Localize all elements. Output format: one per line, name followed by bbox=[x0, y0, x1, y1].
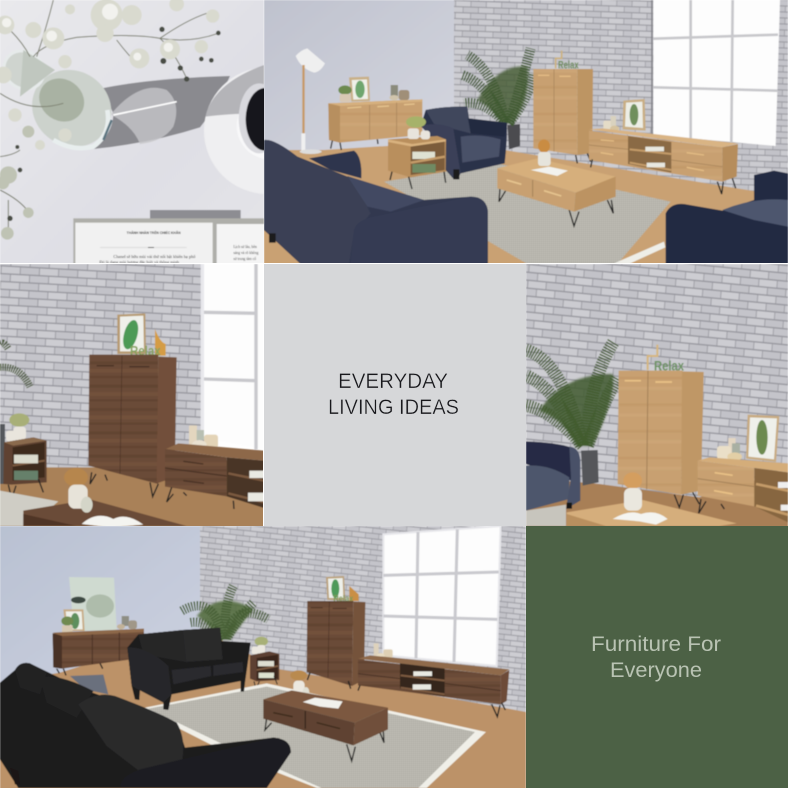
black leather sofa, foreground bbox=[0, 663, 291, 788]
navy armchair bbox=[526, 441, 580, 511]
potted palm behind loveseat bbox=[182, 586, 268, 639]
navy sofa, foreground right bbox=[666, 171, 788, 264]
tall oak cabinet with Relax sign bbox=[533, 51, 593, 163]
patterned rug bbox=[140, 683, 486, 788]
oak sideboard with decor bbox=[328, 77, 422, 150]
walnut side table with plant bbox=[0, 413, 47, 499]
patterned rug bbox=[384, 163, 671, 264]
tagline: furniture for everyone: Everyone bbox=[610, 659, 702, 682]
floor bbox=[264, 145, 755, 263]
rug corner bbox=[526, 505, 566, 526]
plain grey wall bbox=[264, 0, 454, 150]
oak cube side table with books bbox=[388, 116, 446, 189]
walnut small side table with plant bbox=[250, 637, 279, 689]
panel: centre title tile bbox=[264, 264, 526, 526]
tall oak cabinet with Relax sign bbox=[618, 345, 704, 507]
tall walnut cabinet with frame and Relax sign: Relax bbox=[130, 343, 161, 359]
floor lamp bbox=[296, 48, 325, 154]
white brick wall bbox=[454, 0, 788, 197]
tall walnut cabinet with frame and sign bbox=[307, 576, 365, 689]
open book bbox=[73, 210, 264, 264]
brick wall bbox=[526, 264, 788, 497]
floor bbox=[526, 481, 788, 527]
glass vase bbox=[6, 50, 114, 150]
open book: Lịch sử lâu, bền bbox=[233, 245, 257, 250]
tall oak cabinet with Relax sign: Relax bbox=[558, 60, 579, 72]
open book: sử trung tâm cổ bbox=[233, 256, 256, 261]
walnut coffee table with magazine and vases bbox=[263, 670, 388, 761]
tall oak cabinet with Relax sign: Relax bbox=[654, 357, 684, 373]
panel: flat-lay photo with vase, coffee and book bbox=[0, 0, 264, 263]
floor bbox=[0, 626, 526, 788]
panel: oak furniture with navy sofas living room bbox=[264, 0, 788, 264]
coffee table with magazine and vases bbox=[23, 468, 187, 527]
heading: everyday living ideas bbox=[328, 370, 459, 419]
heading: everyday living ideas: LIVING IDEAS bbox=[328, 396, 459, 419]
open book: THẢNH NHÀN TRÊN CHIẾC KHĂN bbox=[127, 230, 181, 235]
walnut TV console with decor bbox=[358, 643, 509, 717]
panel: oak cabinet close-up bbox=[526, 264, 788, 527]
potted palm bbox=[462, 48, 534, 149]
open book: sáng và rõ không bbox=[233, 251, 259, 255]
bright window bbox=[202, 264, 264, 449]
potted palm bbox=[526, 342, 618, 486]
saucer and coffee cup bbox=[204, 65, 264, 194]
rug corner bbox=[0, 491, 58, 526]
navy sofa, foreground left bbox=[264, 140, 488, 264]
oak coffee table with magazine and vase bbox=[567, 472, 737, 526]
oak TV console with decor bbox=[589, 99, 738, 194]
walnut sideboard with decor bbox=[53, 616, 144, 675]
heading: everyday living ideas: EVERYDAY bbox=[338, 370, 448, 393]
cast shadow of vase bbox=[93, 76, 230, 149]
bright window bbox=[652, 0, 780, 146]
floor bbox=[0, 461, 264, 527]
oak coffee table with magazine bbox=[497, 139, 616, 226]
panel: green tagline tile bbox=[526, 526, 788, 788]
open book: Chanel sẽ hữu mùi vải thứ nổi bật khiến hạ phố bbox=[113, 254, 196, 259]
tagline: furniture for everyone: Furniture For bbox=[591, 633, 721, 656]
walnut TV console with decor bbox=[165, 425, 264, 509]
tagline: furniture for everyone bbox=[591, 633, 721, 682]
brick wall bbox=[200, 526, 526, 712]
plain blue-grey wall bbox=[0, 526, 200, 683]
open book: Đó là dạng mùi hương đặc biệt và thông minh bbox=[99, 259, 180, 264]
bright window bbox=[383, 526, 501, 666]
tall walnut cabinet with frame and Relax sign bbox=[88, 313, 177, 497]
brick wall bbox=[0, 264, 204, 471]
navy armchair bbox=[421, 107, 507, 179]
botanical art prints bbox=[63, 577, 117, 631]
panel: walnut furniture with black leather sofas bbox=[0, 526, 526, 788]
framed leaf print bbox=[746, 415, 779, 462]
tall walnut cabinet with frame and sign: Relax bbox=[333, 593, 354, 603]
panel: walnut cabinet close-up bbox=[0, 264, 264, 527]
dried baby's breath branches bbox=[0, 0, 221, 240]
black leather loveseat bbox=[127, 628, 251, 710]
palm fronds at left edge bbox=[0, 343, 30, 387]
oak TV console with decor bbox=[698, 438, 788, 522]
